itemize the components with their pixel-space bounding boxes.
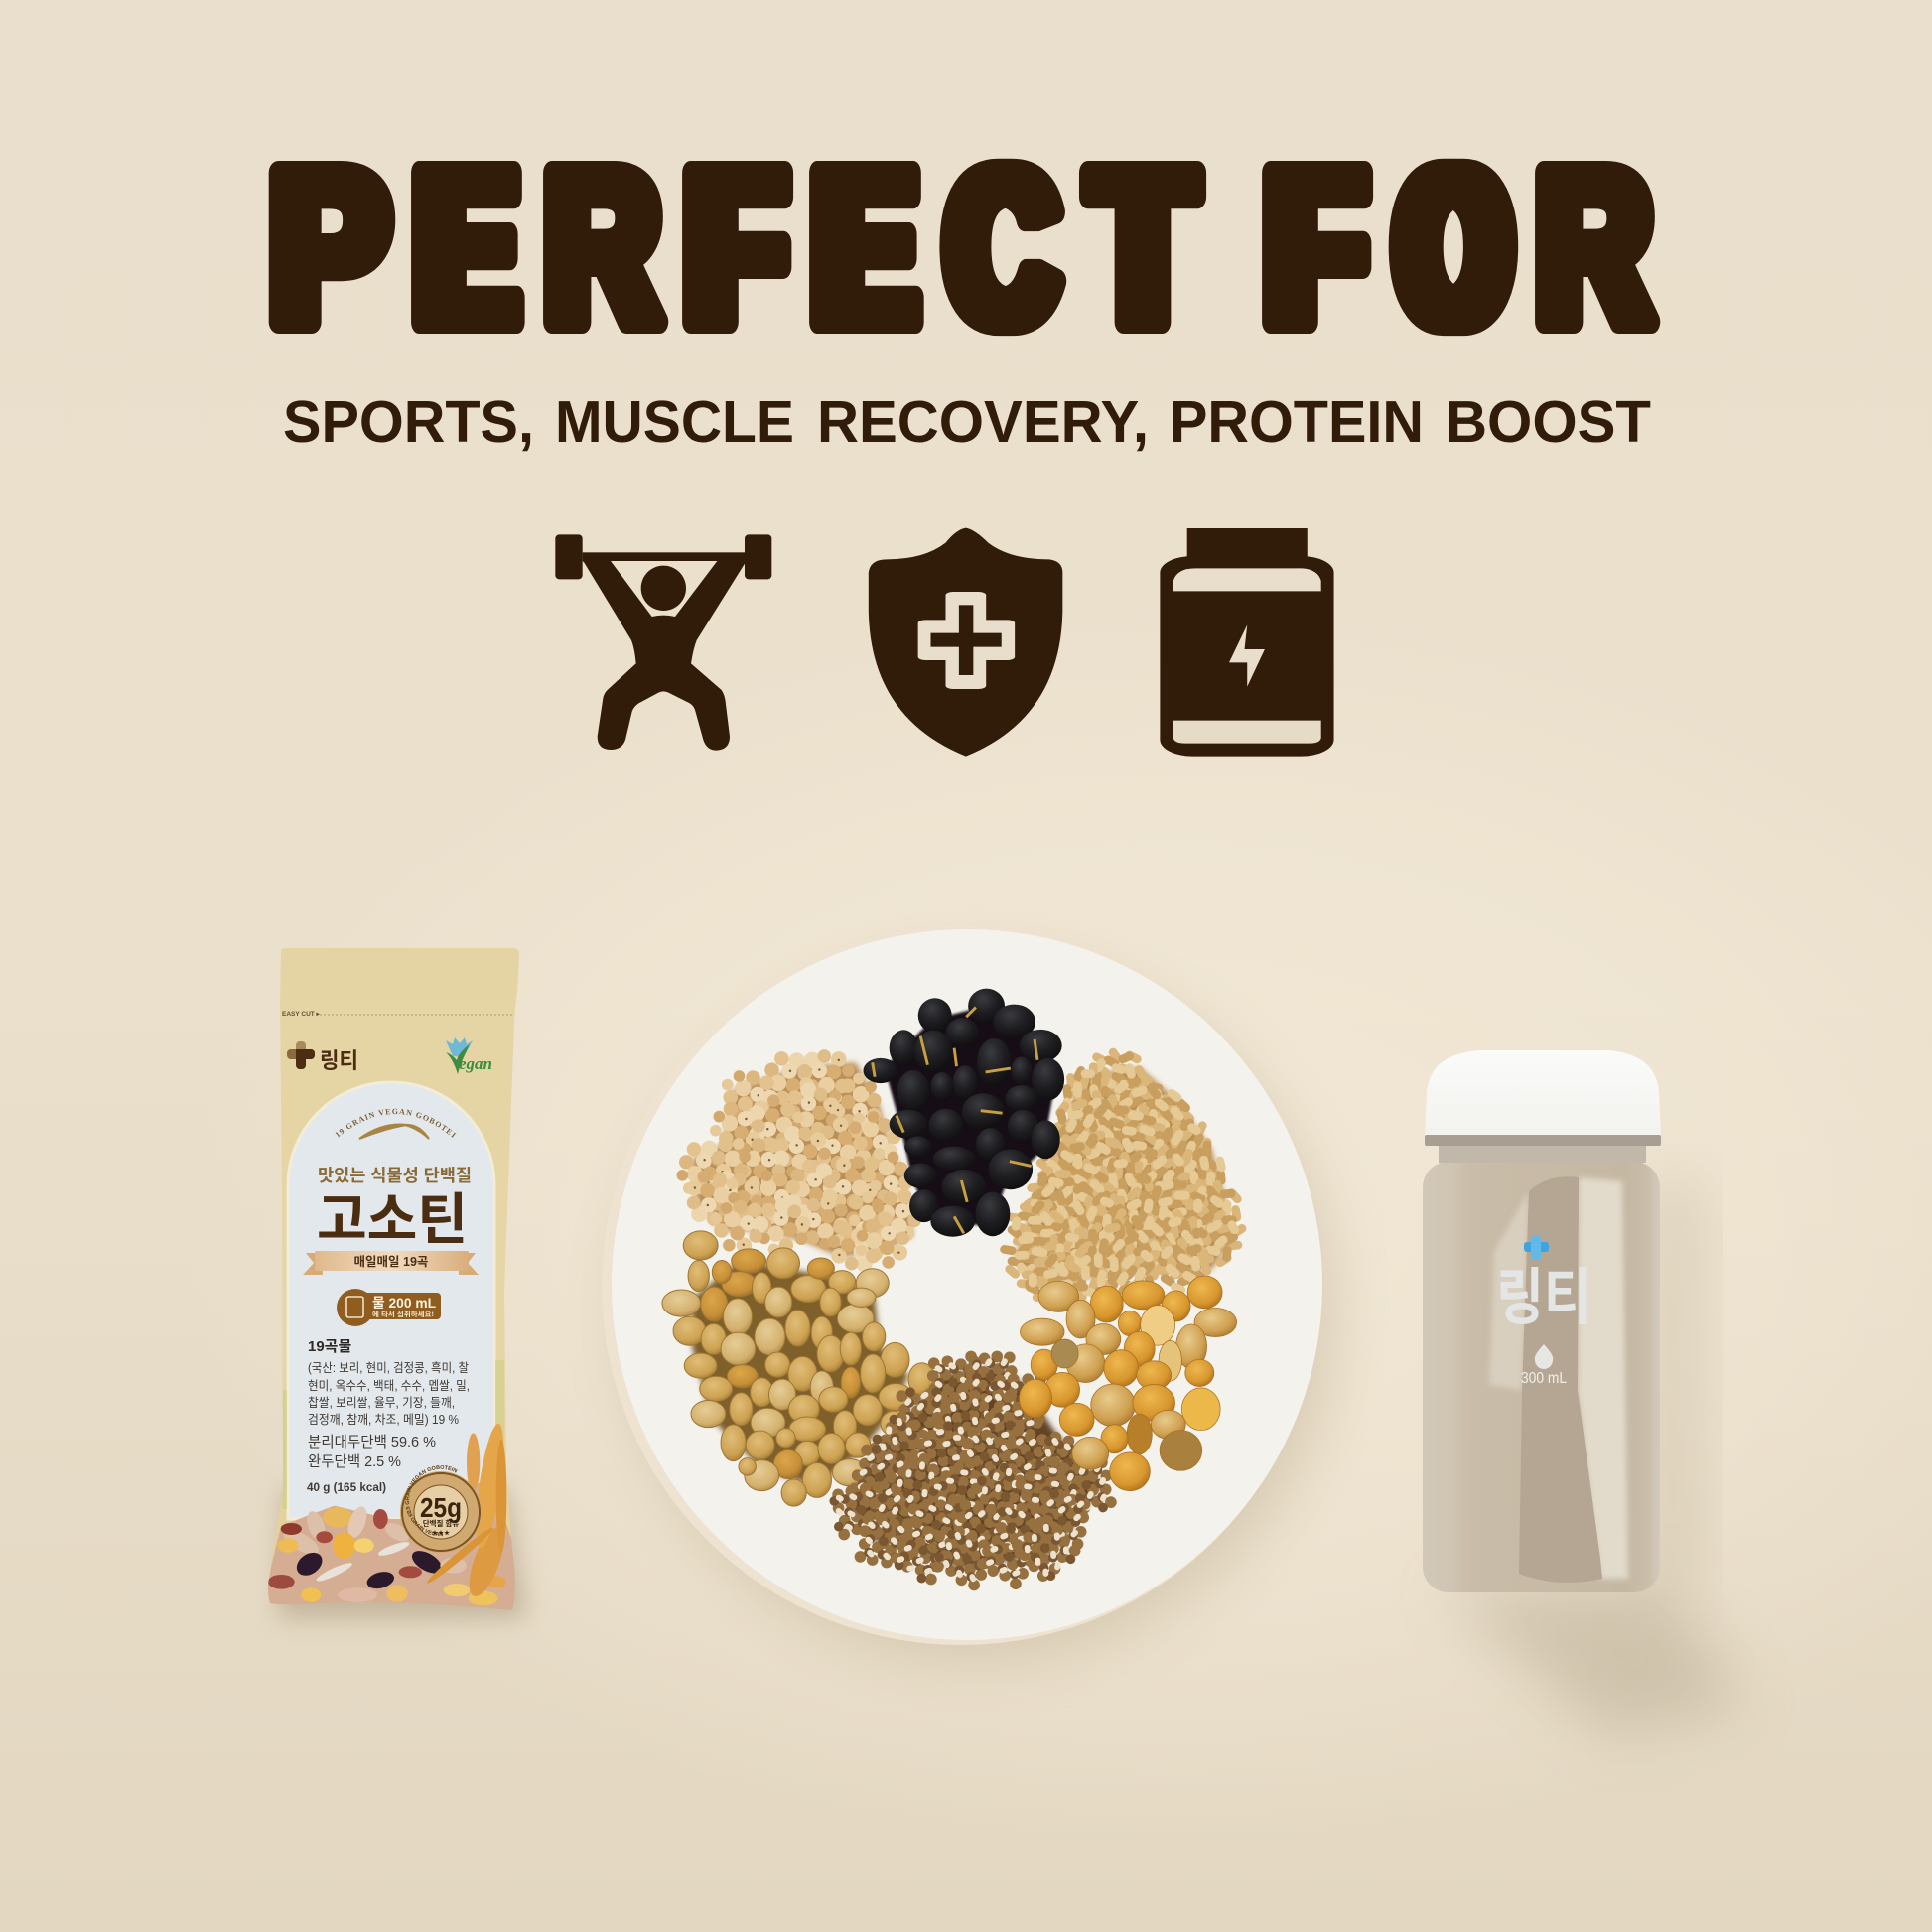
title: PERFECT FOR: E: [817, 127, 911, 368]
ingredients text: 완두단백 2.5 %: [308, 1453, 401, 1470]
ribbon: [303, 1251, 479, 1275]
brand logo on pack: 링티: [320, 1048, 358, 1073]
subtitle: SPORTS,: [283, 389, 534, 455]
protein stamp: ★★★: [432, 1530, 450, 1537]
ingredients text: 분리대두단백 59.6 %: [308, 1434, 436, 1450]
title: PERFECT FOR: F: [1269, 127, 1361, 368]
title: PERFECT FOR: T: [1094, 127, 1191, 368]
bottle volume label: 300 mL: [1521, 1370, 1567, 1387]
water instruction pill: 에 타서 섭취하세요!: [372, 1310, 434, 1318]
protein stamp: 단백질 함유: [423, 1518, 459, 1528]
product: plate of grains: [602, 926, 1333, 1660]
protein stamp: 19 GRAIN VEGAN GOBOTEIN: [405, 1465, 458, 1513]
ingredients text: 19곡물: [308, 1338, 351, 1355]
buckwheat: [833, 1356, 1112, 1587]
title: PERFECT FOR: E: [419, 127, 512, 368]
brand logo on pack: [287, 1041, 356, 1070]
bottle body: [1423, 1162, 1660, 1592]
title: PERFECT FOR: O: [1401, 127, 1506, 368]
plate shadow: [622, 961, 1333, 1660]
ingredients text: 현미, 옥수수, 백태, 수수, 멥쌀, 밀,: [308, 1379, 470, 1393]
product: stick pack: [268, 948, 533, 1628]
subtitle: PROTEIN: [1170, 389, 1424, 455]
protein stamp: 19 GRAIN VEGAN: [407, 1511, 443, 1537]
grains: [662, 989, 1248, 1587]
pack product name: 고소틴: [317, 1188, 468, 1251]
ingredients text: 40 g (165 kcal): [307, 1480, 386, 1494]
vegan logo: egan: [459, 1054, 492, 1073]
liquid streak: [1489, 1176, 1628, 1583]
ingredients text: (국산: 보리, 현미, 검정콩, 흑미, 찰: [308, 1361, 469, 1375]
title: PERFECT FOR: C: [949, 127, 1055, 368]
ribbon: 매일매일 19곡: [354, 1254, 428, 1269]
icon: supplement jar with bolt: [1160, 528, 1334, 757]
protein stamp: 25g: [420, 1492, 462, 1523]
product: shaker bottle: [1423, 1050, 1747, 1737]
bottle shadow: [1440, 1579, 1747, 1737]
side band: [282, 1360, 504, 1509]
pack tagline: 맛있는 식물성 단백질: [318, 1166, 472, 1185]
white arch label: [288, 1082, 494, 1519]
icon: weightlifter: [555, 534, 771, 751]
bottle logo: [1496, 1235, 1591, 1332]
puffed rice: [1002, 1052, 1248, 1312]
tear line: easy cut: EASY CUT ▸: [282, 1011, 321, 1018]
arch heading: 19 grain vegan gobotein: [336, 1108, 457, 1140]
protein stamp: [400, 1465, 482, 1553]
puffed barley: [664, 1043, 930, 1279]
title: PERFECT FOR: [271, 127, 1651, 368]
illustration: grains and wheat: [265, 1422, 519, 1615]
bottle logo: 링티: [1496, 1264, 1591, 1332]
title: PERFECT FOR: R: [1537, 127, 1651, 368]
subtitle: RECOVERY,: [817, 389, 1149, 455]
arch heading: 19 grain vegan gobotein: 19 GRAIN VEGAN GOBOTEIN: [336, 1108, 457, 1138]
bottle rim: [1425, 1135, 1661, 1146]
plate rim: [602, 926, 1320, 1645]
icon: water drop: [1535, 1344, 1553, 1369]
water instruction pill: [337, 1289, 441, 1326]
subtitle: [283, 389, 1651, 455]
bottle cap: [1425, 1050, 1661, 1135]
plate surface: [612, 929, 1322, 1640]
subtitle: MUSCLE: [555, 389, 794, 455]
bottle neck: [1439, 1146, 1646, 1163]
title: PERFECT FOR: R: [545, 127, 659, 368]
subtitle: BOOST: [1446, 389, 1651, 455]
title: PERFECT FOR: F: [689, 127, 781, 368]
icon: shield with cross: [869, 528, 1062, 757]
icons row: [555, 528, 1334, 757]
black soybeans: [863, 989, 1064, 1237]
corn kernels: [1020, 1276, 1237, 1491]
title: PERFECT FOR: P: [271, 127, 388, 368]
roasted soybeans: [662, 1231, 935, 1506]
ingredients text: 검정깨, 참깨, 차조, 메밀) 19 %: [308, 1413, 459, 1427]
vegan logo: [446, 1037, 492, 1074]
ingredients text: 찹쌀, 보리쌀, 율무, 기장, 들깨,: [308, 1396, 455, 1410]
water instruction pill: 물 200 mL: [372, 1295, 436, 1311]
ingredients text: [307, 1338, 470, 1494]
